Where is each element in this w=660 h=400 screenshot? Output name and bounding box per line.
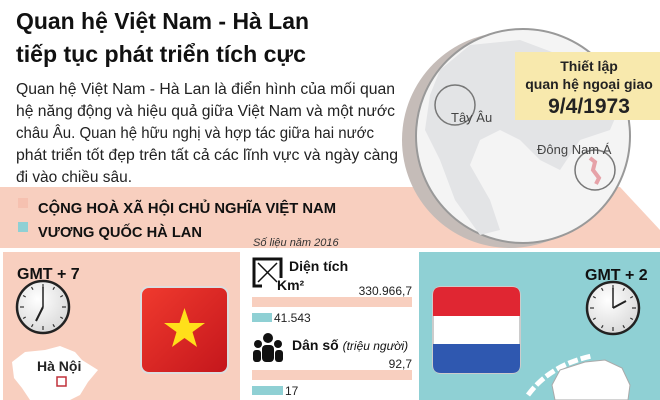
icon: Hanoi map bbox=[12, 346, 98, 400]
intro text: châu Âu. Quan hệ hữu nghị và hợp tác giữa hai nước bbox=[16, 125, 374, 142]
GMT +2: GMT + 2 bbox=[585, 267, 648, 284]
legend: CỘNG HOÀ XÃ HỘI CHỦ NGHĨA VIỆT NAM bbox=[38, 199, 336, 217]
icon: Netherlands map bbox=[528, 356, 630, 400]
intro text: phát triển tốt đẹp trên tất cả các lĩnh vực và ngày càng bbox=[16, 147, 398, 164]
legend: VƯƠNG QUỐC HÀ LAN bbox=[38, 223, 202, 241]
bar: area: 330.966,7 bbox=[359, 284, 412, 298]
panel: Netherlands bbox=[419, 252, 660, 400]
title: Quan hệ Việt Nam - Hà Lan bbox=[16, 8, 309, 34]
intro text: đi vào chiều sâu. bbox=[16, 169, 132, 186]
bar: population bbox=[252, 357, 412, 398]
callout: establishment date: Thiết lập bbox=[560, 58, 618, 74]
intro text: hệ năng động và hiệu quả giữa Việt Nam và một nước bbox=[16, 103, 395, 120]
icon: Netherlands flag bbox=[433, 287, 520, 373]
intro text: Quan hệ Việt Nam - Hà Lan là điển hình của mối quan bbox=[16, 81, 395, 98]
GMT +7: GMT + 7 bbox=[17, 266, 80, 283]
callout: establishment date bbox=[515, 52, 660, 120]
icon: area bbox=[254, 259, 281, 286]
panel: statistics: Dân số (triệu người) bbox=[292, 337, 408, 353]
bar: area bbox=[252, 284, 412, 325]
title: tiếp tục phát triển tích cực bbox=[16, 41, 306, 67]
callout: establishment date: 9/4/1973 bbox=[548, 95, 630, 118]
panel: Vietnam bbox=[3, 252, 240, 400]
icon: clock 7 bbox=[17, 281, 69, 333]
bar: population: 92,7 bbox=[389, 357, 412, 371]
panel: statistics bbox=[252, 258, 412, 398]
icon: Vietnam flag bbox=[141, 287, 228, 373]
label: Đông Nam Á: Đông Nam Á bbox=[537, 142, 612, 157]
icon: people bbox=[253, 333, 283, 362]
panel: statistics: Diện tích bbox=[289, 258, 348, 274]
label: Tây Âu bbox=[435, 85, 492, 125]
intro text bbox=[16, 81, 398, 186]
bar: area: 41.543 bbox=[274, 311, 311, 325]
legend bbox=[18, 198, 336, 241]
label: Đông Nam Á bbox=[537, 142, 615, 190]
icon: clock 2 bbox=[587, 282, 639, 334]
label: Tây Âu: Tây Âu bbox=[451, 110, 492, 125]
icon: Hanoi map: Hà Nội bbox=[37, 358, 81, 374]
pink legend band bbox=[0, 187, 660, 248]
data year note: Số liệu năm 2016 bbox=[253, 237, 339, 249]
title bbox=[16, 8, 309, 67]
callout: establishment date: quan hệ ngoại giao bbox=[525, 76, 653, 92]
bar: population: 17 bbox=[285, 384, 299, 398]
panel: statistics: Km² bbox=[277, 277, 305, 293]
globe bbox=[402, 29, 630, 248]
